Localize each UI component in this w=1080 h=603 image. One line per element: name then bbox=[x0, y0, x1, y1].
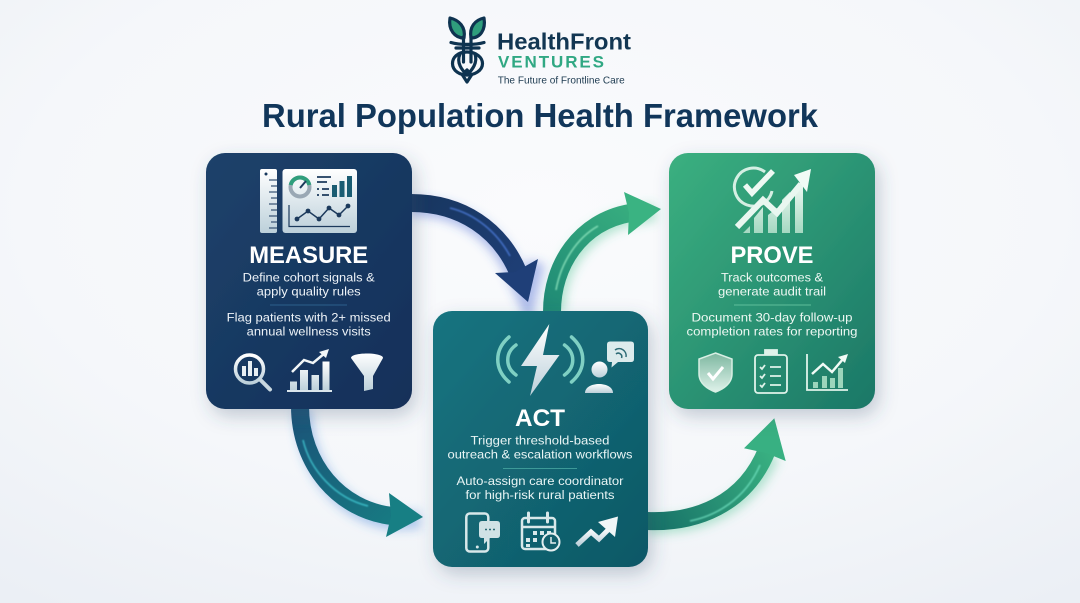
icon: lightning and signal bbox=[498, 324, 583, 396]
text: act description: outreach & escalation workflows bbox=[448, 448, 632, 462]
heading: prove: PROVE bbox=[730, 242, 814, 269]
logo ventures: VENTURES bbox=[498, 53, 604, 72]
text: measure example: Flag patients with 2+ missed bbox=[227, 310, 391, 324]
icon: magnifier chart bbox=[236, 355, 270, 390]
logo tagline: The Future of Frontline Care bbox=[498, 76, 625, 86]
arrow: act to prove bbox=[552, 192, 661, 312]
logo mark bbox=[450, 18, 484, 82]
icon: bar chart bbox=[287, 349, 332, 391]
arrow: measure to act bbox=[411, 203, 538, 302]
heading: measure: MEASURE bbox=[249, 242, 368, 269]
arrow: act to prove lower bbox=[647, 418, 786, 525]
panel: prove bbox=[669, 153, 875, 409]
icon: person with speech bubble bbox=[585, 342, 634, 393]
logo bbox=[450, 18, 631, 86]
panel: act bbox=[433, 311, 648, 567]
icon: check and growth chart bbox=[734, 168, 811, 233]
title: Rural Population Health Framework bbox=[262, 97, 819, 134]
text: act example: Auto-assign care coordinator bbox=[456, 474, 624, 488]
panel: measure bbox=[206, 153, 412, 409]
text: act description: Trigger threshold-based bbox=[470, 434, 610, 448]
icon: ruler and dashboard bbox=[260, 169, 357, 233]
icon: calendar clock bbox=[522, 513, 560, 550]
icon: phone message bbox=[466, 514, 500, 552]
heading: act: ACT bbox=[515, 405, 565, 432]
icon: line chart bbox=[807, 354, 848, 390]
text: act example: for high-risk rural patients bbox=[466, 488, 614, 502]
text: prove description: Track outcomes & bbox=[721, 270, 823, 284]
logo name: HealthFront bbox=[497, 28, 631, 54]
text: measure description: apply quality rules bbox=[257, 284, 361, 298]
text: measure example: annual wellness visits bbox=[247, 324, 371, 338]
icon: rising arrow bbox=[577, 516, 618, 545]
text: prove description: generate audit trail bbox=[718, 284, 826, 298]
icon: clipboard bbox=[755, 350, 787, 393]
text: prove example: completion rates for reporting bbox=[686, 324, 858, 338]
text: measure description: Define cohort signals & bbox=[243, 270, 375, 284]
icon: funnel bbox=[351, 354, 383, 391]
arrow: measure to act lower bbox=[300, 406, 423, 537]
icon: shield bbox=[699, 353, 732, 392]
text: prove example: Document 30-day follow-up bbox=[692, 310, 853, 324]
